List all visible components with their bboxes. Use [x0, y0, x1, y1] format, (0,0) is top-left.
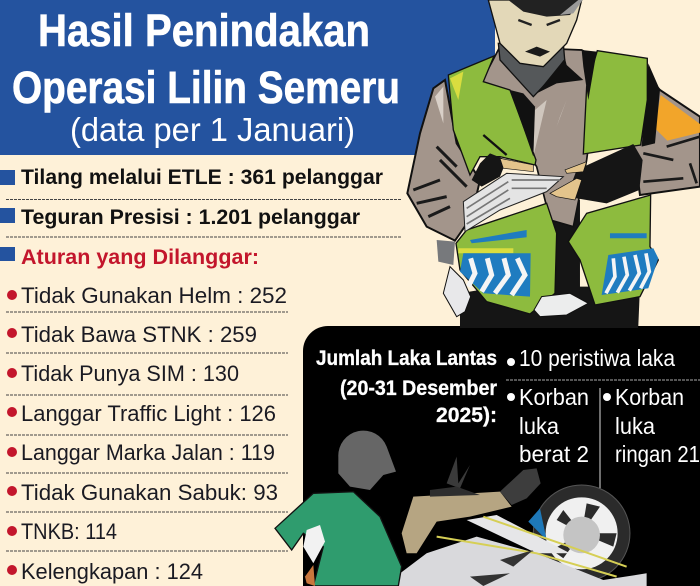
motorcycle wheel: [528, 485, 630, 582]
list: violated rules: Tidak Bawa STNK : 259: [21, 322, 257, 347]
heading: accident count: (20-31 Desember: [340, 377, 497, 400]
title: Operasi Lilin Semeru: [12, 62, 400, 113]
item: ETLE tickets: Tilang melalui ETLE : 361 pelanggar: [21, 166, 383, 189]
heading: accident count: 2025):: [436, 404, 497, 427]
panel: traffic accident data: [303, 320, 700, 586]
holster and belt buckle: [437, 240, 455, 265]
upper vest left: [448, 56, 536, 175]
head: [488, 0, 582, 67]
fallen rider feet: [447, 457, 470, 488]
shirt: [482, 47, 600, 227]
list: violated rules: Langgar Traffic Light : 126: [21, 401, 276, 426]
item: warnings: Teguran Presisi : 1.201 pelanggar: [21, 206, 360, 229]
list: violated rules: Tidak Punya SIM : 130: [21, 361, 239, 386]
bystander: [275, 431, 402, 586]
title: Hasil Penindakan: [38, 5, 370, 56]
left sleeve: [407, 80, 480, 241]
orange armband: [655, 95, 700, 141]
illustration: motorcycle accident: [275, 431, 647, 586]
stat: incidents: 10 peristiwa laka: [519, 345, 675, 371]
stat: serious injuries: [507, 384, 589, 467]
cap: [508, 0, 583, 17]
heading: accident count: [316, 347, 497, 427]
list: violated rules: Langgar Marka Jalan : 119: [21, 440, 275, 465]
officer base: [460, 320, 638, 328]
heading: accident count: Jumlah Laka Lantas: [316, 347, 497, 370]
list: violated rules: Kelengkapan : 124: [21, 559, 203, 584]
right sleeve: [633, 75, 700, 195]
gloves: [472, 153, 507, 187]
stat: minor injuries: luka: [615, 413, 655, 439]
lower vest left: [456, 203, 557, 314]
heading: violated rules: Aturan yang Dilanggar:: [21, 246, 259, 269]
list: violated rules: TNKB: 114: [21, 519, 117, 544]
stat: minor injuries: [603, 384, 700, 467]
fallen rider legs: [402, 492, 512, 553]
reflective panel right: [602, 248, 658, 295]
lower vest right: [568, 195, 658, 305]
reflective panel left: [460, 253, 531, 297]
list: violated rules: Tidak Gunakan Helm : 252: [21, 283, 287, 308]
stat: serious injuries: Korban: [519, 384, 589, 410]
stat: serious injuries: berat 2: [519, 441, 589, 467]
pen: [483, 135, 507, 155]
panel: enforcement summary: [0, 166, 402, 269]
illustration: police officer writing a ticket: [407, 0, 700, 326]
upper vest right: [583, 51, 647, 154]
motorcycle body: [383, 515, 647, 586]
header banner: [0, 0, 495, 155]
title: [12, 5, 400, 113]
subtitle: (data per 1 Januari): [70, 111, 355, 148]
list: violated rules: [6, 283, 288, 584]
list: violated rules: Tidak Gunakan Sabuk: 93: [21, 480, 278, 505]
notebook: [463, 173, 563, 232]
fingers: [500, 158, 587, 200]
stat: serious injuries: luka: [519, 413, 559, 439]
neck: [498, 43, 565, 97]
stat: minor injuries: Korban: [615, 384, 684, 410]
